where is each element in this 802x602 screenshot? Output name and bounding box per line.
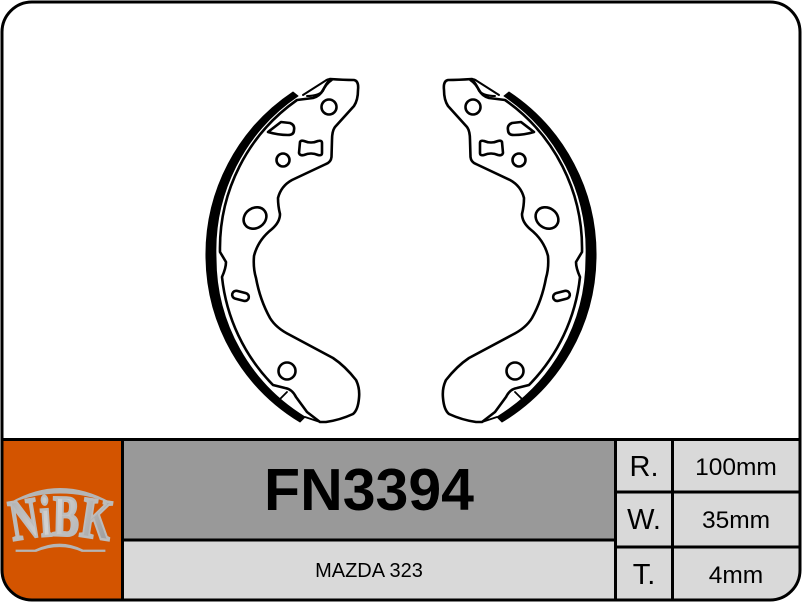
logo wordmark: NiBK <box>6 494 114 542</box>
label: R.: R. <box>630 451 658 483</box>
logo bottom arc <box>16 544 105 552</box>
label: T.: T. <box>633 559 655 591</box>
logo top arc <box>10 488 111 503</box>
label: W.: W. <box>627 504 661 536</box>
specs table background <box>615 439 799 599</box>
vehicle panel <box>122 539 615 599</box>
part number panel <box>122 439 615 539</box>
brake shoes drawing <box>206 79 596 422</box>
value: 100mm: 100mm <box>695 454 777 481</box>
value: 35mm: 35mm <box>702 507 770 534</box>
part number: FN3394 <box>264 457 474 523</box>
left brake shoe <box>206 79 359 422</box>
value: 4mm: 4mm <box>709 562 763 589</box>
vehicle model: MAZDA 323 <box>315 560 423 582</box>
right brake shoe <box>443 79 596 422</box>
table grid lines <box>2 439 800 600</box>
logo panel <box>3 439 122 599</box>
NiBK logo <box>6 488 114 552</box>
